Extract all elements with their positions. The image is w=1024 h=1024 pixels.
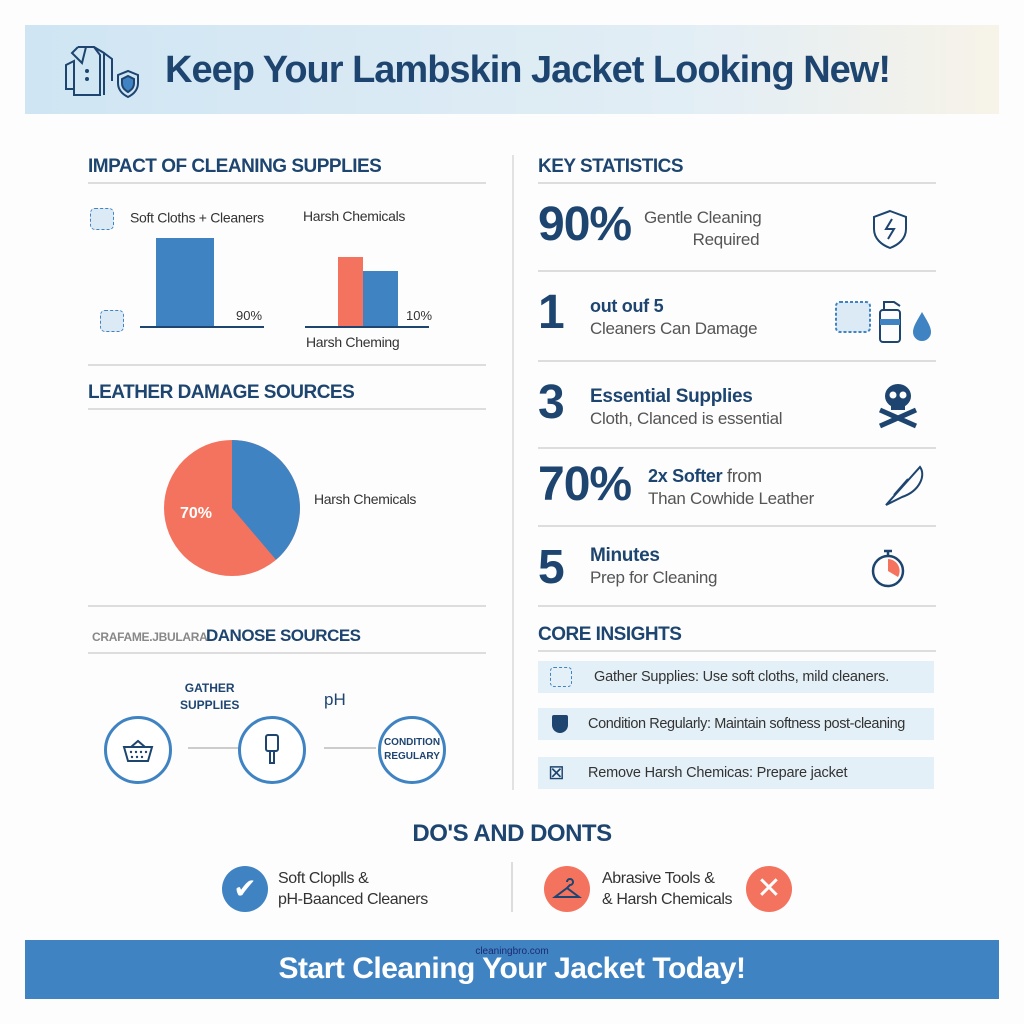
legend: soft cloths: Soft Cloths + Cleaners: [130, 210, 264, 226]
panel: leather damage sources: Harsh Chemicals: [314, 491, 416, 507]
panel: process flow: CRAFAME.JBULARA: [92, 630, 208, 644]
panel: process flow: DANOSE SOURCES: [206, 626, 361, 645]
stat 1 out of 5: [538, 286, 931, 343]
do item: [222, 866, 428, 912]
stat 90%: [538, 198, 907, 251]
stat 3: 3: [538, 376, 564, 429]
stat 3: [538, 376, 917, 429]
pie chart: [164, 440, 300, 576]
stat 5 minutes: Minutes: [590, 545, 660, 566]
panel: key statistics: [538, 156, 936, 607]
footer banner: Start Cleaning Your Jacket Today!: [279, 952, 745, 985]
icon: brush circle: [238, 716, 306, 784]
panel: impact of cleaning supplies: Harsh Chemicals: [303, 208, 405, 224]
panel: impact of cleaning supplies: IMPACT OF CLEANING SUPPLIES: [88, 156, 381, 177]
panel: process flow: pH: [324, 690, 346, 709]
panel: process flow: GATHER: [185, 681, 235, 695]
icon: basket circle: [104, 716, 172, 784]
pie chart: 70%: [180, 505, 212, 522]
stat 1 out of 5: out ouf 5: [590, 296, 663, 316]
stat 90%: Required: [693, 230, 759, 249]
do item: ✔: [233, 873, 257, 904]
do item: pH-Baanced Cleaners: [278, 891, 428, 908]
stat 1 out of 5: Cleaners Can Damage: [590, 319, 757, 338]
stat 70%: Than Cowhide Leather: [648, 489, 814, 508]
stat 3: Cloth, Clanced is essential: [590, 409, 782, 428]
insight 1: Gather Supplies: Use soft cloths, mild cleaners.: [594, 669, 889, 685]
footer banner: [25, 940, 999, 999]
dont item: & Harsh Chemicals: [602, 891, 732, 908]
bar chart: 10%: [406, 308, 432, 323]
insight 3: ⊠: [548, 762, 565, 784]
insight 2: [538, 708, 934, 740]
stat 90%: Gentle Cleaning: [644, 208, 761, 227]
arrow: [324, 747, 376, 749]
dont item: Abrasive Tools &: [602, 870, 714, 887]
bar chart: 90%: [236, 308, 262, 323]
step: condition regularly: [378, 716, 446, 784]
stat 5 minutes: Prep for Cleaning: [590, 568, 717, 587]
panel: core insights: CORE INSIGHTS: [538, 624, 681, 645]
insight 3: [538, 757, 934, 789]
insight 1: [538, 661, 934, 693]
divider vertical: [512, 155, 514, 790]
stat 3: Essential Supplies: [590, 386, 752, 407]
arrow: [188, 747, 240, 749]
stat 1 out of 5: 1: [538, 286, 564, 339]
panel: process flow: [88, 626, 486, 784]
insight 3: Remove Harsh Chemicas: Prepare jacket: [588, 765, 847, 781]
bar chart: [100, 238, 432, 350]
step: condition regularly: CONDITION: [384, 737, 440, 748]
heading: dos and donts: DO'S AND DONTS: [412, 820, 612, 847]
insight 2: Condition Regularly: Maintain softness post-cleaning: [588, 716, 905, 732]
stat 5 minutes: 5: [538, 541, 564, 594]
stat 70%: 2x Softer from: [648, 466, 762, 486]
legend: soft cloths: [90, 208, 264, 230]
dont item: ✕: [756, 872, 782, 905]
panel: process flow: SUPPLIES: [180, 698, 239, 712]
stat 70%: 70%: [538, 458, 631, 511]
stat 5 minutes: [538, 541, 904, 594]
stat 90%: 90%: [538, 198, 631, 251]
footer banner: cleaningbro.com: [475, 946, 549, 957]
dont item: [544, 866, 792, 912]
header banner: [25, 25, 999, 114]
panel: key statistics: KEY STATISTICS: [538, 156, 683, 177]
bar chart: Harsh Cheming: [306, 334, 399, 350]
icon: jacket with shield: [65, 46, 139, 98]
panel: impact of cleaning supplies: [88, 156, 486, 350]
stat 70%: [538, 458, 924, 511]
panel: leather damage sources: [88, 382, 486, 576]
title: Keep Your Lambskin Jacket Looking New!: [165, 49, 890, 91]
panel: leather damage sources: LEATHER DAMAGE SOURCES: [88, 382, 354, 403]
do item: Soft Cloplls &: [278, 870, 368, 887]
step: condition regularly: REGULARY: [384, 751, 440, 762]
